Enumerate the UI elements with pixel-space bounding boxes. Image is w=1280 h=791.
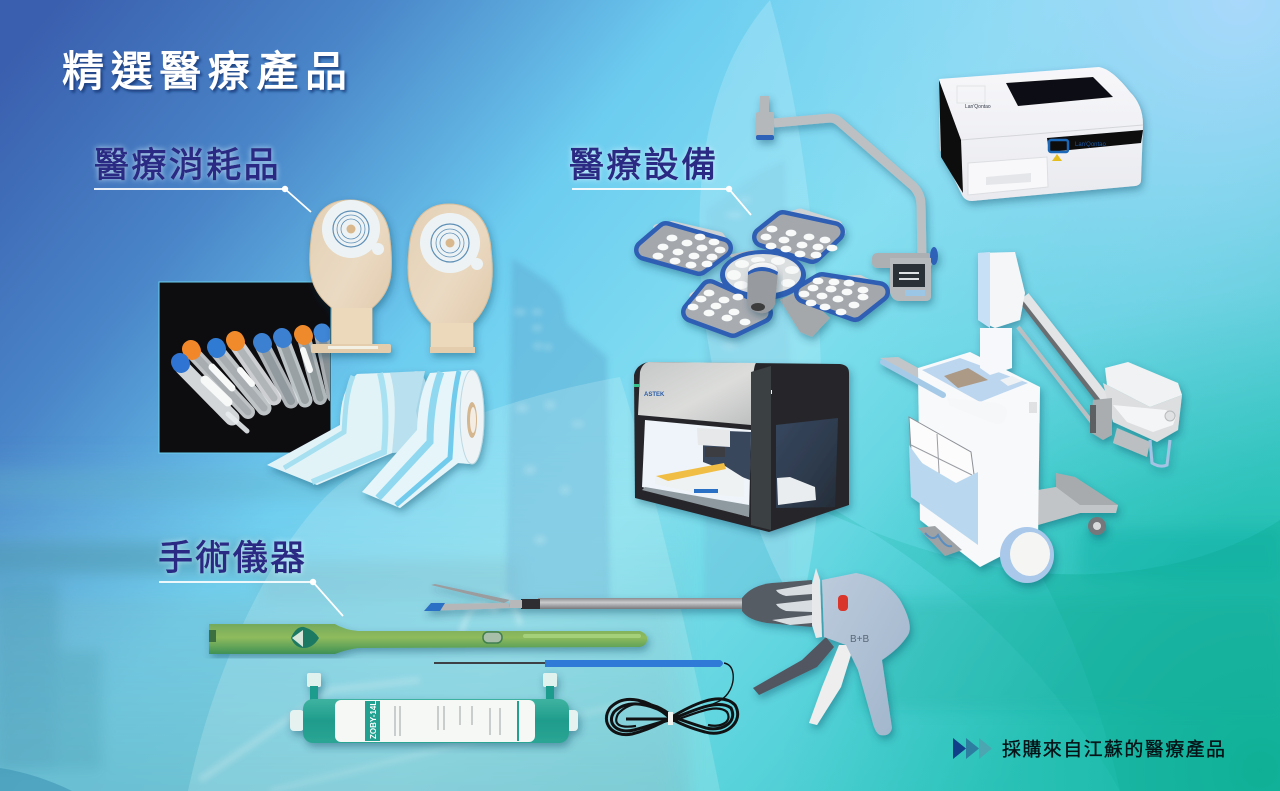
product: analyzer: Lan'Qontao [965, 104, 991, 110]
icon: x-ray column [980, 328, 1012, 375]
icon: control box [872, 253, 932, 268]
product: ostomy bag 2 [408, 204, 492, 353]
product: surgical light [645, 96, 938, 337]
call to action: 採購來自江蘇的醫療產品 [1002, 738, 1226, 760]
product: orthopedic green sleeve [209, 624, 647, 654]
icon: center hub [720, 250, 806, 300]
icon: x-ray base [1038, 473, 1118, 525]
product: analyzer [939, 67, 1143, 201]
icon: light head petal, bottom left [693, 284, 745, 300]
icon: lower yoke [780, 290, 830, 337]
icon: light head petal, left [657, 225, 728, 250]
icon: release lever [809, 645, 854, 725]
icon: light head petal, top right [780, 212, 842, 232]
icon: stapler grip [822, 573, 910, 735]
icon: cable clip [1029, 402, 1037, 413]
heading: medical equipment [569, 146, 751, 215]
product: laparoscopic stapler: B+B [850, 634, 870, 645]
product: dialyzer [290, 673, 578, 743]
heading: surgical instruments [158, 539, 343, 616]
icon: handle [880, 357, 918, 380]
heading: medical consumables: 醫療消耗品 [94, 146, 281, 185]
icon: x-ray arm [1018, 327, 1098, 430]
LED dots [652, 226, 868, 325]
icon: ceiling arm [774, 118, 922, 255]
icon: pocket [909, 445, 978, 545]
blurred city backdrop [0, 440, 1280, 791]
product: liquid handler [634, 362, 849, 532]
icon: triple arrows [953, 738, 992, 759]
heading: medical equipment: 醫療設備 [569, 146, 719, 185]
product: laparoscopic stapler [424, 568, 910, 735]
heading: surgical instruments: 手術儀器 [158, 539, 308, 578]
icon: film [909, 417, 975, 505]
icon: x-ray cabinet [918, 352, 1040, 567]
heading: medical consumables [94, 146, 311, 212]
translucent petals [699, 0, 821, 610]
product: dialyzer: ZOBY-14L [369, 701, 378, 739]
icon: main wheel [1000, 527, 1054, 583]
icon: foot pedal [918, 526, 962, 556]
left towers [0, 580, 59, 770]
icon: light head petal, right [815, 278, 884, 300]
product: sterilization pouch rolls [267, 370, 484, 508]
tower A [506, 258, 610, 600]
product: analyzer: Lan'Qontao [1075, 142, 1107, 148]
icon: x-ray tube head [1113, 428, 1150, 457]
product: centrifuge tubes photo [159, 282, 334, 453]
product: liquid handler: ASTEK [644, 392, 665, 398]
icon: handle post [747, 267, 778, 313]
tower B [704, 160, 790, 600]
product: mobile x-ray [880, 252, 1182, 583]
product: ostomy bag 1 [310, 200, 392, 353]
product: electrosurgical pencil [434, 660, 738, 735]
icon: trigger [753, 637, 834, 695]
title: 精選醫療產品 [62, 48, 354, 95]
